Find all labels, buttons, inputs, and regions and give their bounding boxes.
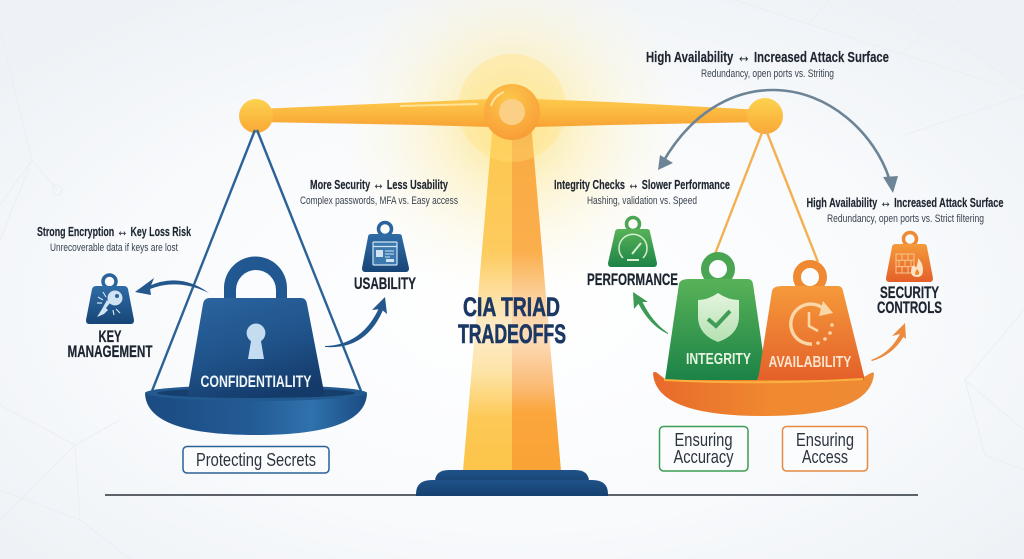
tradeoff text: security controls: [806, 194, 1004, 225]
tradeoff text: usability: [300, 176, 458, 207]
clock icon: [791, 301, 834, 345]
availability label: AVAILABILITY: [768, 354, 852, 371]
keyhole: [247, 324, 265, 359]
tradeoff text: security controls: Redundancy, open ports vs. Strict filtering: [827, 213, 984, 225]
ensuring accuracy box: [660, 426, 748, 471]
left pan strings: [152, 130, 361, 391]
tradeoff text: key loss: [37, 223, 191, 254]
confidentiality label: CONFIDENTIALITY: [200, 372, 312, 391]
tradeoff text: usability: More Security ↔ Less Usability: [310, 176, 448, 193]
protecting secrets box: [183, 446, 329, 473]
ground line: [105, 494, 918, 496]
right pan strings: [715, 130, 818, 262]
security controls label: SECURITY: [880, 284, 939, 302]
tradeoff text: performance: Integrity Checks ↔ Slower Performance: [554, 176, 730, 193]
usability label: USABILITY: [354, 275, 416, 293]
tradeoff text: key loss: Unrecoverable data if keys are lost: [50, 242, 178, 254]
arrow: confidentiality to key management: [135, 278, 209, 295]
key management weight icon: [86, 275, 134, 324]
key management label: MANAGEMENT: [68, 343, 152, 361]
tradeoff text: performance: [554, 176, 730, 207]
key management label: [68, 328, 152, 361]
scale column: [463, 122, 561, 471]
arrow: confidentiality to usability: [325, 297, 387, 347]
ensuring access box: Ensuring: [796, 429, 854, 450]
scale beam: [239, 54, 783, 162]
right scale pan: [653, 372, 874, 416]
tradeoff text: key loss: Strong Encryption ↔ Key Loss Risk: [37, 223, 191, 240]
ensuring access box: [782, 426, 868, 471]
security controls label: [877, 284, 942, 317]
integrity weight: [665, 256, 767, 380]
ensuring access box: Access: [802, 446, 848, 467]
arrow: availability to security controls: [871, 323, 906, 361]
performance label: PERFORMANCE: [587, 271, 678, 289]
security controls label: CONTROLS: [877, 299, 942, 317]
tradeoff text: performance: Hashing, validation vs. Speed: [587, 195, 697, 207]
integrity label: INTEGRITY: [686, 351, 751, 368]
confidentiality weight: [188, 256, 324, 397]
scale base: [416, 470, 608, 496]
ensuring accuracy box: Ensuring: [674, 429, 732, 450]
availability weight: [757, 264, 864, 380]
arrow: integrity to performance: [633, 292, 668, 334]
tradeoff text: top: High Availability ↔ Increased Attack Surface: [646, 46, 889, 67]
key management label: KEY: [98, 328, 122, 346]
title: CIA TRIAD: [463, 292, 560, 322]
right pan rim: [664, 378, 863, 383]
title: TRADEOFFS: [458, 319, 566, 349]
title: [458, 292, 566, 349]
left scale pan: [145, 385, 367, 435]
ensuring accuracy box: Accuracy: [674, 446, 734, 467]
glow behind pivot: [320, 0, 710, 330]
curved double-headed arrow: [658, 90, 898, 193]
security controls weight icon: [886, 232, 933, 282]
tradeoff text: usability: Complex passwords, MFA vs. Easy access: [300, 195, 458, 207]
performance weight icon: [608, 218, 657, 267]
protecting secrets box: Protecting Secrets: [196, 449, 316, 470]
tradeoff text: top: Redundancy, open ports vs. Striting: [701, 68, 834, 80]
tradeoff text: top: [646, 46, 889, 80]
shield icon: [698, 293, 739, 342]
usability weight icon: [362, 222, 409, 272]
